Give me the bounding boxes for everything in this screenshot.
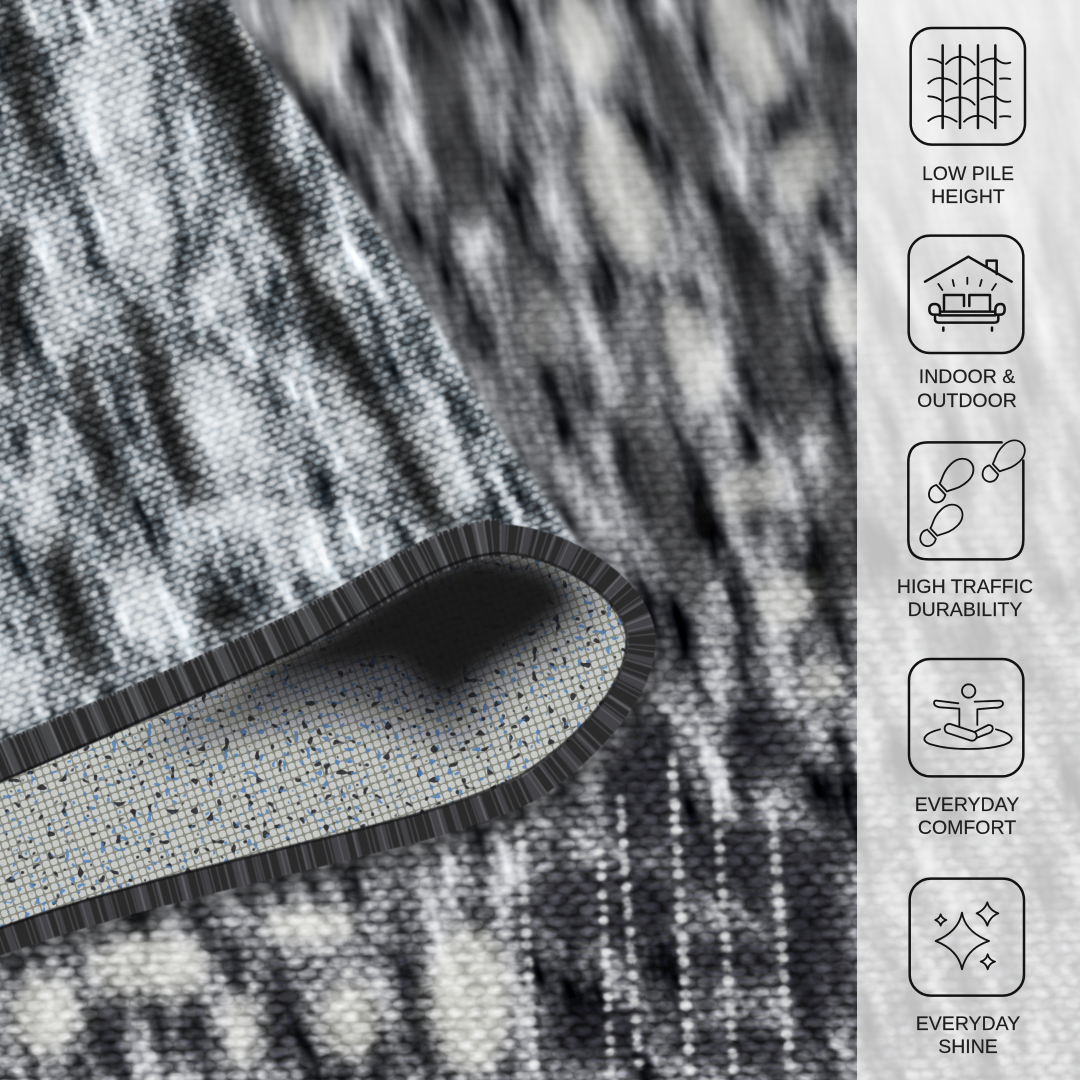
panel: white feature column [857, 0, 1080, 1080]
label: low pile height: HEIGHT [931, 186, 1005, 208]
photo: soft edge shadow beside the roll [215, 0, 600, 560]
label: high traffic durability: DURABILITY [908, 599, 1022, 621]
icon: woven fibres [911, 28, 1025, 145]
label: high traffic durability: HIGH TRAFFIC [897, 576, 1033, 598]
feature: low pile height [911, 28, 1025, 208]
label: everyday comfort: EVERYDAY [915, 794, 1019, 816]
label: indoor and outdoor: INDOOR & [919, 366, 1015, 388]
feature: everyday comfort [909, 659, 1023, 839]
roll stitches [0, 0, 577, 740]
label: everyday shine: EVERYDAY [916, 1013, 1020, 1035]
photo: rolled-over rug top face [0, 0, 586, 742]
hollow: dark interior of the fold [130, 540, 600, 750]
photo: rug underside [0, 554, 629, 928]
label: indoor and outdoor: OUTDOOR [917, 390, 1017, 412]
icon: seated meditation figure [909, 659, 1023, 776]
label: everyday shine: SHINE [938, 1036, 998, 1058]
feature: high traffic durability [897, 435, 1033, 621]
icon: footprints [908, 435, 1030, 559]
label: everyday comfort: COMFORT [918, 817, 1016, 839]
label: low pile height: LOW PILE [922, 163, 1014, 185]
light stitch columns in the foreground [520, 760, 790, 1075]
photo: shadow cast by the roll [0, 640, 660, 965]
icon: sparkles [910, 879, 1024, 996]
photo: rolled edge binding [0, 519, 642, 945]
edge highlight on roll [303, 118, 576, 543]
icon: house with sofa [909, 236, 1023, 353]
feature: everyday shine [910, 879, 1024, 1058]
feature: indoor and outdoor [909, 236, 1023, 412]
